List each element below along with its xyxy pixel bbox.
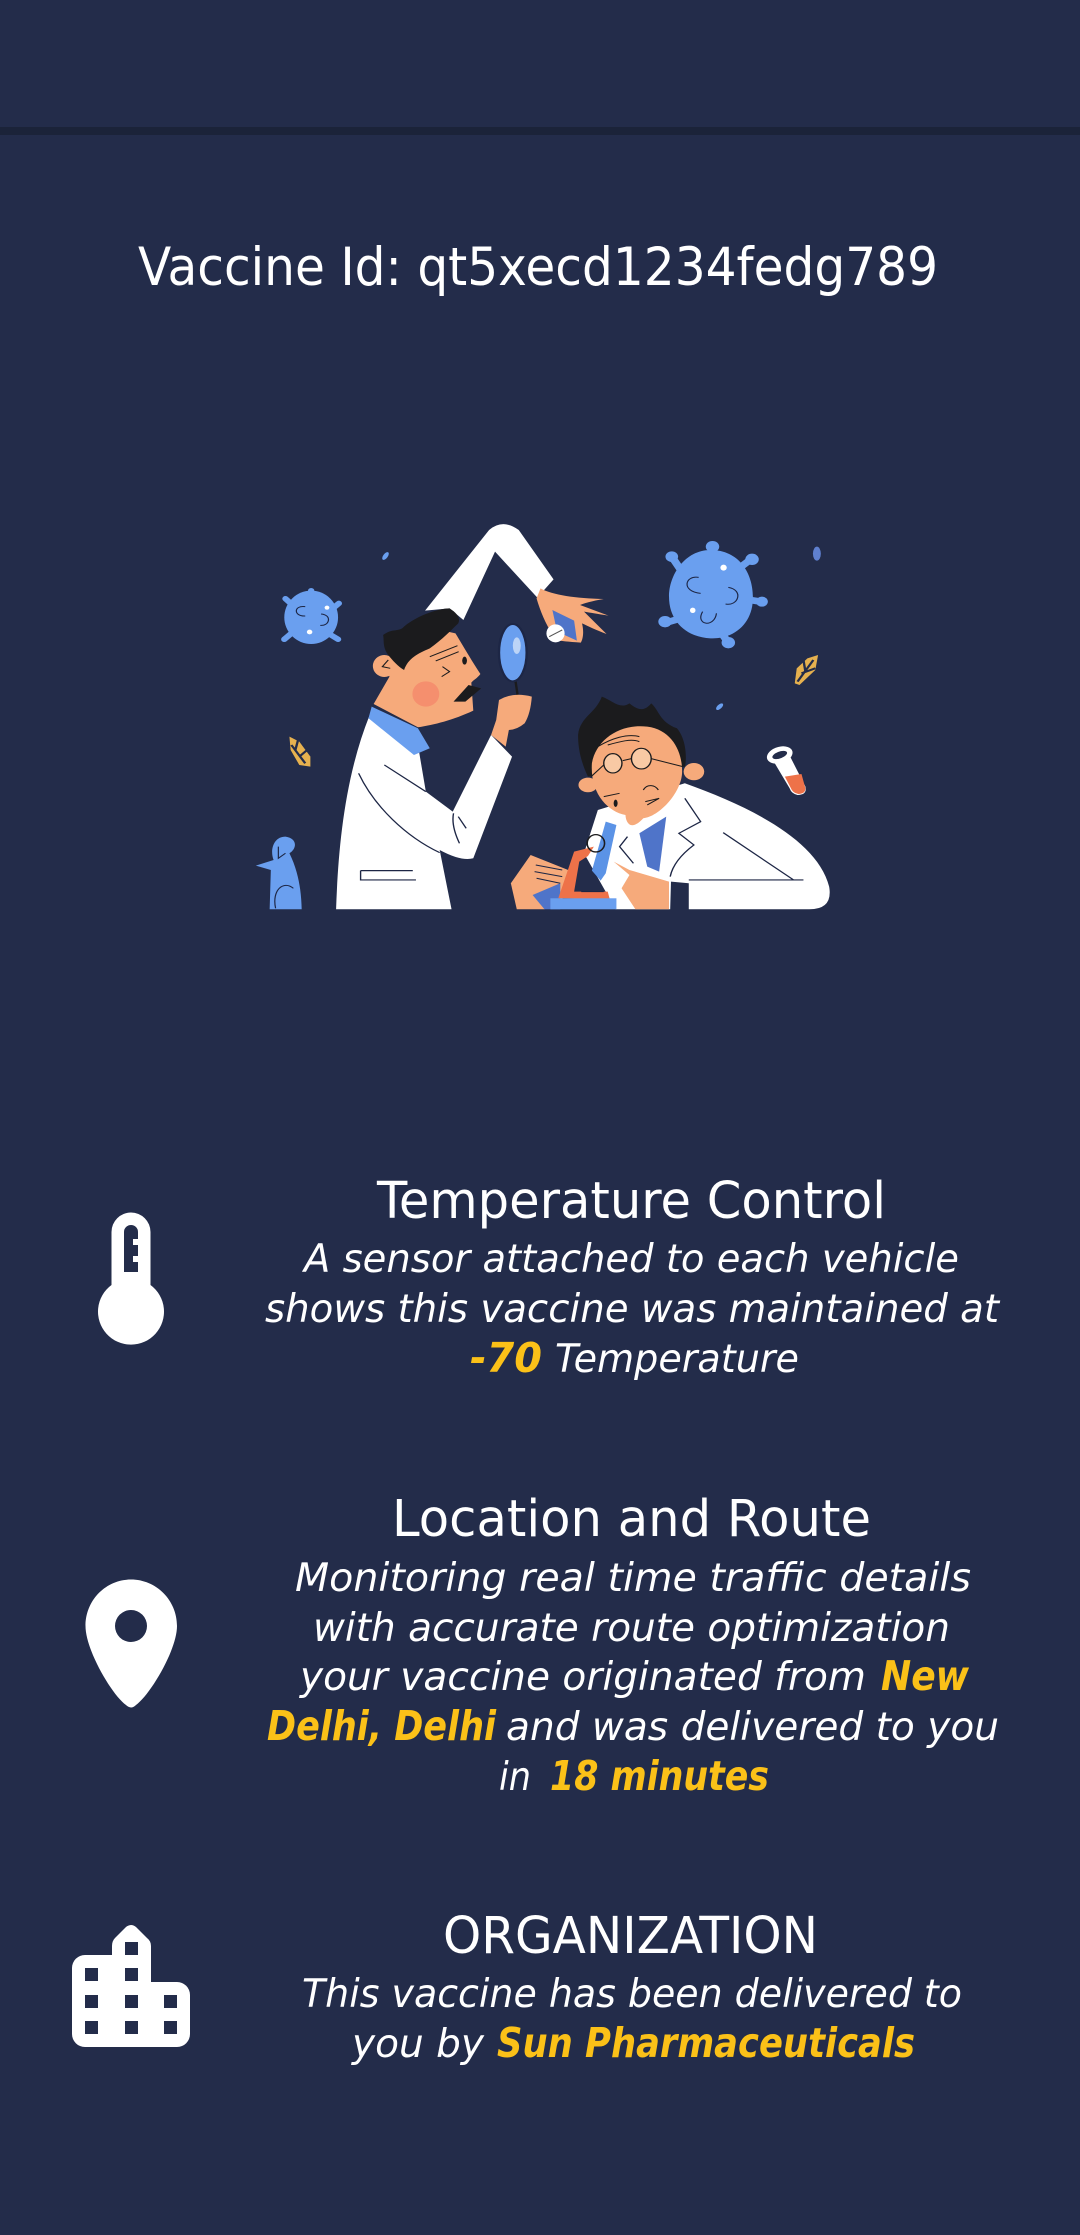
- icon: rabbit: [256, 837, 302, 909]
- blue collar: [369, 707, 430, 755]
- title: vaccine id: Vaccine Id: qt5xecd1234fedg789: [138, 237, 938, 298]
- section: temperature control: [98, 1172, 1001, 1382]
- heading: ORGANIZATION: [443, 1907, 818, 1966]
- standing scientist: [336, 524, 609, 909]
- text block: Temperature: [555, 1337, 799, 1382]
- blue shirt: [639, 817, 666, 872]
- text block: your vaccine originated from: [299, 1655, 866, 1700]
- text block: Monitoring real time traffic details: [295, 1556, 971, 1601]
- illustration: scientists examining a pill: [256, 524, 830, 909]
- seated scientist: [511, 697, 830, 909]
- icon: building: [72, 1925, 190, 2047]
- text block: and was delivered to you: [506, 1705, 999, 1750]
- head: [578, 697, 704, 825]
- microscope: [550, 822, 616, 909]
- icon: thermometer: [98, 1212, 164, 1345]
- lab coat: [584, 783, 830, 909]
- right hand: [614, 862, 669, 909]
- left hand: [511, 855, 568, 909]
- section: organization: [72, 1907, 962, 2067]
- heading: Temperature Control: [376, 1172, 886, 1231]
- text block: 18 minutes: [550, 1752, 769, 1800]
- text block: A sensor attached to each vehicle: [301, 1237, 959, 1282]
- icon: map pin: [86, 1580, 177, 1708]
- text block: in: [499, 1755, 531, 1800]
- text block: [302, 1972, 962, 2067]
- text block: with accurate route optimization: [313, 1606, 950, 1651]
- coat lines: [359, 765, 466, 880]
- text block: -70: [470, 1334, 542, 1382]
- text block: you by: [351, 2022, 485, 2067]
- coat lines: [620, 798, 803, 880]
- text block: Sun Pharmaceuticals: [497, 2019, 915, 2067]
- icon: large virus: [658, 541, 768, 648]
- icon: small virus: [284, 591, 339, 644]
- lab coat: [336, 715, 512, 909]
- header divider: [0, 127, 1080, 135]
- text block: [265, 1237, 1001, 1382]
- text block: shows this vaccine was maintained at: [265, 1287, 1001, 1332]
- icon: test tube: [764, 743, 806, 795]
- heading: Location and Route: [392, 1490, 871, 1549]
- head: [373, 608, 481, 727]
- section: location and route: [86, 1490, 999, 1800]
- raised arm: [425, 524, 554, 620]
- icon: leaves and specks: [289, 547, 821, 767]
- text block: New: [881, 1652, 969, 1700]
- text block: [267, 1556, 999, 1800]
- magnifying glass: [491, 624, 532, 747]
- text block: This vaccine has been delivered to: [302, 1972, 962, 2017]
- text block: Delhi, Delhi: [267, 1702, 497, 1750]
- hand with pill: [537, 588, 609, 643]
